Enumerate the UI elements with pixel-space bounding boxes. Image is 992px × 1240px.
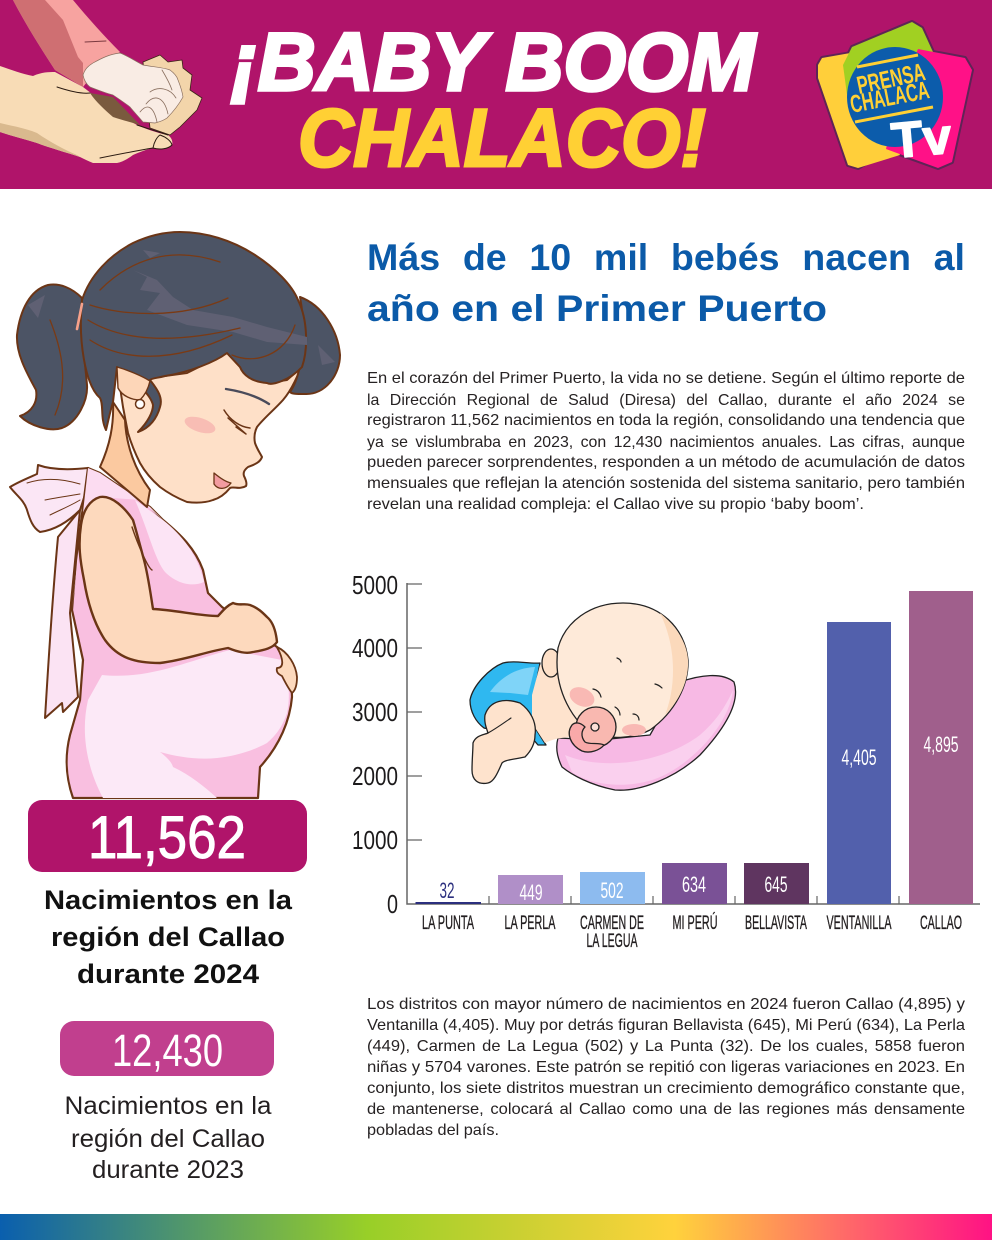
- bar: Carmen de La Legua: 502: [600, 878, 624, 903]
- caption: Nacimientos en la: [44, 885, 293, 915]
- y axis: 2000: [352, 763, 398, 791]
- leg and foot: [472, 701, 535, 783]
- bar: Carmen de La Legua: [580, 872, 645, 952]
- neck: [100, 402, 150, 507]
- pill: [60, 1021, 274, 1076]
- bar: Carmen de La Legua: LA LEGUA: [586, 930, 638, 952]
- bar: La Perla: [498, 875, 563, 934]
- eyes and brows: [593, 658, 662, 720]
- caption: Nacimientos en la: [64, 1092, 272, 1120]
- number: 11,562: [88, 804, 246, 871]
- bar: Ventanilla: VENTANILLA: [826, 912, 892, 934]
- dress highlight on chest: [135, 500, 204, 584]
- lower paragraph: conjunto, los siete distritos muestran un crecimiento demográfico constante que,: [367, 1080, 965, 1097]
- intro paragraph: registraron 11,562 nacimientos en toda la región, consolidando una tendencia que: [367, 412, 965, 429]
- bar: Mi Perú: 634: [682, 872, 706, 897]
- bar: La Perla: LA PERLA: [504, 912, 556, 934]
- pill: [28, 800, 307, 872]
- pacifier: [576, 707, 616, 747]
- blush: [183, 413, 217, 437]
- bar: Mi Perú: [662, 863, 727, 934]
- body: [532, 665, 600, 743]
- caption: región del Callao: [71, 1125, 265, 1153]
- stat: 11,562 births in 2024: [28, 800, 307, 989]
- arm inner line: [132, 527, 152, 570]
- lower paragraph: niñas y 5704 varones. Este patrón se repitió con ligeras variaciones en 2023. En: [367, 1059, 965, 1076]
- caption: durante 2024: [77, 959, 259, 989]
- bar: Ventanilla: [826, 622, 892, 934]
- intro paragraph: pueden parecer sorprendentes, responden a un método de acumulación de datos: [367, 454, 965, 471]
- cheeks: [566, 683, 598, 711]
- lower paragraph: (449), Carmen de La Legua (502) y La Punta (32). De los cuales, 5858 fueron: [367, 1038, 965, 1055]
- heading: año en el Primer Puerto: [367, 288, 827, 329]
- main hair: [81, 232, 306, 432]
- bar: Mi Perú: MI PERÚ: [672, 911, 718, 934]
- arm: [80, 497, 277, 663]
- bar: Callao: [909, 591, 973, 934]
- face: [117, 353, 302, 503]
- caption: [44, 885, 293, 989]
- intro paragraph: la Dirección Regional de Salud (Diresa) del Callao, durante el año 2024 se: [367, 392, 965, 409]
- closed eye: [224, 410, 250, 434]
- intro paragraph: En el corazón del Primer Puerto, la vida no se detiene. Según el último reporte de: [367, 370, 965, 387]
- dress: [67, 468, 292, 798]
- y axis: [352, 572, 980, 919]
- y axis: 3000: [352, 699, 398, 727]
- caption: [64, 1092, 272, 1184]
- dress shoulder strap: [72, 468, 163, 610]
- y axis: 1000: [352, 827, 398, 855]
- ponytail tie: [77, 304, 82, 329]
- caption: región del Callao: [51, 922, 285, 952]
- eyebrow: [226, 389, 269, 404]
- intro paragraph: ya se vislumbraba en 2023, con 12,430 nacimientos anuales. Las cifras, aunque: [367, 434, 965, 451]
- bar: La Perla: 449: [520, 880, 542, 905]
- intro paragraph: mensuales que reflejan la atención sostenida del sistema sanitario, pero también: [367, 475, 965, 492]
- title line: chalaco: CHALACO!: [298, 93, 706, 184]
- logo: Prensa Chalaca TV: Tv: [889, 108, 954, 169]
- bar chart: births by district: [352, 572, 980, 952]
- hair shine: [133, 250, 307, 345]
- bar: Bellavista: [744, 863, 809, 934]
- heading: [367, 237, 965, 329]
- y axis: 5000: [352, 572, 398, 600]
- mouth: [214, 473, 231, 488]
- y axis: 0: [387, 891, 398, 919]
- lower paragraph: [367, 996, 965, 1139]
- ribbon bow and tail: [10, 465, 92, 718]
- diaper: [470, 662, 546, 745]
- ponytail shine: [28, 295, 335, 365]
- number: 12,430: [112, 1025, 223, 1076]
- illustration: sleeping baby: [470, 603, 736, 790]
- logo: Prensa Chalaca TV: PRENSA: [854, 58, 928, 100]
- pillow: [557, 676, 736, 790]
- bar: La Punta: 32: [440, 878, 454, 903]
- lower paragraph: de mantenerse, colocará al Callao como una de las regiones más densamente: [367, 1101, 965, 1118]
- rainbow footer bar: [0, 1214, 992, 1240]
- lower paragraph: Los distritos con mayor número de nacimientos en 2024 fueron Callao (4,895) y: [367, 996, 965, 1013]
- bar: La Punta: [416, 878, 481, 934]
- bar: Bellavista: BELLAVISTA: [745, 912, 807, 934]
- bar: La Punta: LA PUNTA: [422, 912, 474, 934]
- bar: Callao: 4,895: [924, 732, 958, 757]
- head: [557, 603, 688, 737]
- logo: Prensa Chalaca TV: CHALACA: [848, 76, 932, 119]
- illustration: pregnant woman: [10, 232, 340, 798]
- title line: baby boom: ¡BABY BOOM: [231, 17, 757, 108]
- lower paragraph: Ventanilla (4,405). Muy por detrás figuran Bellavista (645), Mi Perú (634), La Perla: [367, 1017, 965, 1034]
- icon: adult hands holding baby hand: [0, 0, 202, 163]
- earring: [136, 400, 144, 408]
- intro paragraph: revelan una realidad compleja: el Callao vive su propio ‘baby boom’.: [367, 496, 864, 513]
- right hair bun: [290, 297, 340, 394]
- logo: Prensa Chalaca TV: [818, 22, 972, 169]
- lower paragraph: pobladas del país.: [367, 1122, 499, 1139]
- bar: Bellavista: 645: [764, 872, 788, 897]
- stat: 12,430 births in 2023: [60, 1021, 274, 1184]
- bar: Carmen de La Legua: CARMEN DE: [580, 912, 644, 934]
- ponytail: [17, 285, 87, 429]
- dress highlight on belly: [85, 650, 289, 798]
- bar: Ventanilla: 4,405: [842, 745, 876, 770]
- ear: [542, 649, 560, 677]
- heading: Más de 10 mil bebés nacen al: [367, 237, 965, 278]
- ear: [117, 367, 150, 400]
- caption: durante 2023: [92, 1156, 244, 1184]
- header banner: [0, 0, 992, 189]
- intro paragraph: [367, 370, 965, 513]
- fingers under belly: [277, 647, 297, 693]
- hair strands: [50, 255, 295, 415]
- y axis: 4000: [352, 635, 398, 663]
